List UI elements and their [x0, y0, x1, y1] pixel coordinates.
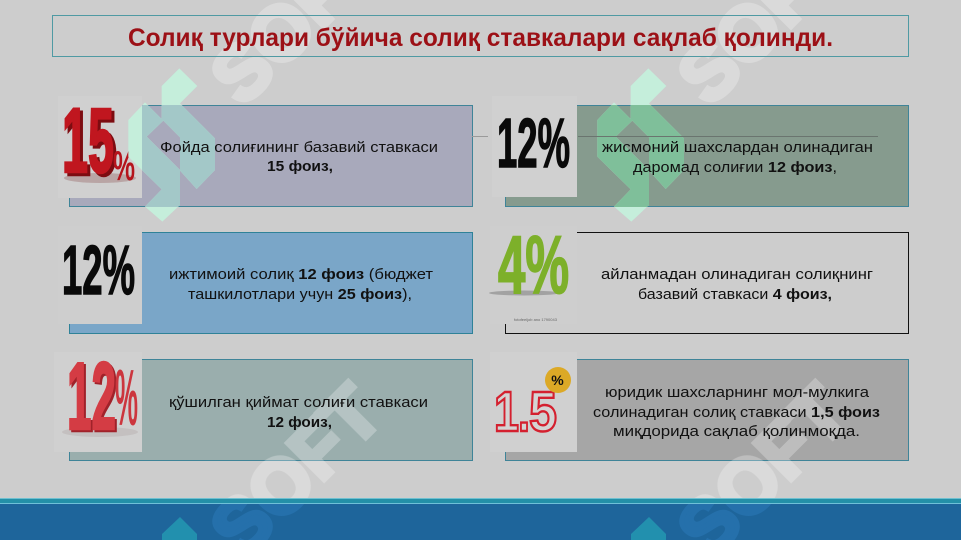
icon: 15 percent: 15: [62, 90, 114, 192]
logo watermark right over card: [597, 105, 684, 207]
text: profit tax: Фойда солиғининг базавий ставкаси: [160, 139, 438, 156]
icon: 1.5 percent badge: 1: [494, 380, 519, 444]
icon: 1.5 percent badge: [494, 367, 571, 444]
text: social tax: ташкилотлари учун 25 фоиз ),: [188, 286, 412, 303]
text: profit tax: [160, 139, 438, 175]
text: turnover tax: [601, 266, 874, 303]
text: turnover tax: айланмадан олинадиган солиқнинг: [601, 266, 874, 283]
text: social tax: ижтимоий солиқ 12 фоиз (бюджет: [169, 266, 433, 283]
text: VAT: 12 фоиз,: [267, 414, 332, 431]
panel: social tax background: [58, 226, 472, 334]
icon: 1.5 percent badge: %: [551, 372, 564, 388]
text: personal income tax: жисмоний шахслардан олинадиган: [602, 139, 873, 156]
text: personal income tax: даромад солиғии 12 фоиз ,: [633, 159, 837, 176]
panel: profit tax background: [58, 96, 472, 206]
text: turnover tax: базавий ставкаси 4 фоиз,: [638, 286, 832, 303]
panel: property tax background: [490, 352, 908, 460]
icon: 1.5 percent badge: .: [518, 380, 530, 444]
icon: 12 percent red (VAT): [62, 343, 138, 452]
text: VAT: қўшилган қиймат солиғи ставкаси: [169, 394, 428, 411]
text watermarks: [212, 0, 843, 498]
panel: VAT background: [54, 352, 472, 460]
logo watermark left: [128, 68, 215, 222]
panel: turnover tax background: [490, 226, 908, 334]
icon: 4 percent green: 4%: [498, 220, 569, 311]
icon: 4 percent green: [489, 220, 569, 322]
icon: 12 percent black (personal income): 12%: [497, 104, 570, 182]
text: social tax: [169, 266, 433, 303]
icon: 12 percent red (VAT): 12: [67, 343, 116, 450]
icon: 1.5 percent badge: 5: [529, 380, 557, 444]
icon: 15 percent: %: [113, 142, 135, 189]
infographic canvas: %: [115, 353, 138, 442]
logo watermark right: [597, 68, 684, 222]
thin horizontal rule: [472, 136, 488, 138]
text: property tax: солинадиган солиқ ставкаси 1,5 фоиз: [593, 404, 880, 421]
text: property tax: юридик шахсларнинг мол-мулкига: [605, 384, 870, 401]
icon: 12 percent black (social): 12%: [62, 231, 135, 309]
title frame: [52, 16, 908, 56]
thin horizontal rule right: [578, 136, 878, 138]
footer band: [0, 498, 961, 540]
text: property tax: миқдорида сақлаб қолинмоқда.: [613, 423, 860, 440]
icon: 15 percent: 15: [65, 93, 117, 195]
icon: 4 percent green: fotofeeljob ano 1790043: [514, 317, 558, 322]
logo watermark left over card: [142, 105, 215, 207]
text: property tax: [593, 384, 880, 440]
icon: 12 percent red (VAT): 12: [69, 345, 118, 452]
title: Солиқ турлари бўйича солиқ ставкалари сақлаб қолинди.: [128, 24, 833, 52]
text: VAT: [169, 394, 428, 431]
panel: personal income tax background: [492, 96, 908, 206]
text: profit tax: 15 фоиз,: [267, 158, 333, 175]
text: personal income tax: [602, 139, 873, 176]
